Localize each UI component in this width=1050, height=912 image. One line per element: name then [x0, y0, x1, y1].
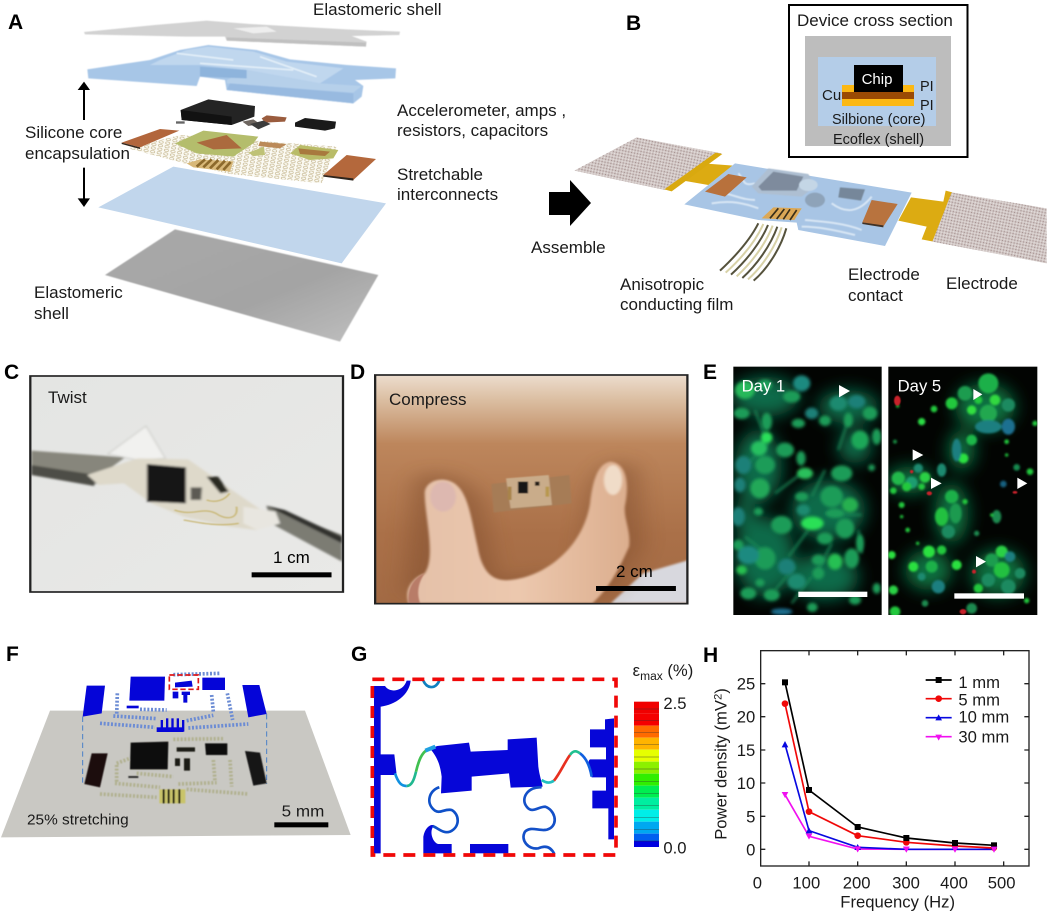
x axis title: Frequency (Hz)	[840, 893, 955, 912]
panel letter B: B	[626, 12, 641, 35]
arrowhead markers	[913, 389, 1027, 567]
y tick labels: 15	[737, 741, 755, 760]
icon: block arrow	[549, 180, 591, 226]
label: silicone core encapsulation: Silicone core	[25, 123, 122, 142]
inset title: Device cross section	[797, 11, 953, 30]
photo background	[31, 377, 343, 592]
x tick labels: 200	[843, 873, 871, 892]
scale bar	[954, 593, 1024, 599]
label: stretchable interconnects: Stretchable	[397, 165, 483, 184]
twisted device	[31, 426, 342, 562]
panel letter F: F	[6, 643, 19, 666]
series 30 mm	[782, 792, 997, 853]
y axis title: Power density (mV	[712, 700, 731, 840]
compress photo image	[375, 375, 689, 604]
left electrode mesh	[574, 137, 722, 190]
scale bar	[798, 592, 867, 597]
silbione core layer	[818, 57, 936, 126]
red dashed region box	[169, 675, 198, 689]
y tick labels: 25	[737, 675, 755, 694]
label: elastomeric shell bottom: Elastomeric	[34, 283, 123, 302]
arrow up	[78, 82, 90, 120]
panel letter A: A	[8, 11, 23, 34]
scale bar 5 mm	[274, 804, 328, 827]
label: day 5: Day 5	[898, 377, 941, 396]
label: anisotropic conducting film: conducting film	[620, 295, 733, 314]
chip block: Chip	[862, 71, 892, 88]
ecoflex shell layer	[805, 36, 951, 146]
y axis title: )	[712, 688, 731, 694]
y tick labels	[737, 675, 755, 859]
blue dashed guides	[83, 714, 267, 784]
right gold connector	[898, 191, 952, 242]
label: 25% stretching: 25% stretching	[27, 811, 129, 828]
y tick labels: 0	[746, 840, 755, 859]
label: 2 cm: 2 cm	[616, 562, 653, 581]
panel letter E: E	[703, 361, 717, 384]
y tick labels: 10	[737, 774, 755, 793]
legend 5 mm: 5 mm	[958, 691, 1000, 710]
anisotropic conducting film strands	[720, 223, 786, 281]
series 5 mm	[782, 700, 997, 851]
arrow down	[78, 168, 90, 207]
line chart	[712, 651, 1029, 912]
exploded layer stack	[78, 21, 400, 342]
label: electrode contact: contact	[848, 286, 903, 305]
colour bar max label: 2.5	[663, 694, 686, 713]
panel G: strain simulation	[351, 643, 693, 857]
red dashed frame	[372, 679, 616, 855]
panel F: stretching overlay	[1, 643, 351, 837]
axes and ticks	[761, 651, 1029, 866]
x tick labels: 500	[988, 873, 1016, 892]
panel E: fluorescence microscopy	[732, 367, 1038, 617]
solid blue layout regions	[374, 681, 614, 853]
colour bar title: (%)	[663, 661, 693, 680]
inset frame	[789, 5, 968, 157]
green cells day 5	[887, 373, 1038, 617]
right electrode mesh	[932, 192, 1047, 263]
legend 30 mm: 30 mm	[958, 727, 1009, 746]
panel letter C: C	[4, 361, 19, 384]
chip block	[854, 65, 903, 92]
day 1 image	[732, 367, 882, 615]
y axis title: 2	[712, 694, 724, 700]
x tick labels	[753, 873, 1016, 892]
simulated layout in blue	[83, 673, 267, 732]
label: accelerometer and passives: Accelerometer, amps ,	[397, 101, 566, 120]
photo of stretched device	[84, 739, 267, 803]
colour bar title: ε	[633, 661, 640, 680]
legend	[926, 673, 1009, 746]
label: silbione core: Silbione (core)	[832, 112, 926, 128]
photo frame	[30, 376, 343, 592]
strain map	[372, 661, 693, 857]
series 1 mm	[782, 679, 997, 848]
panel B: assembled device	[574, 5, 1047, 314]
colour bar title: max	[640, 669, 663, 683]
silicone core top layer	[87, 45, 396, 103]
left gold connector	[664, 153, 733, 191]
encapsulated circuit board	[684, 163, 912, 246]
label: stretchable interconnects: interconnects	[397, 185, 498, 204]
panel letter G: G	[351, 643, 367, 666]
series 10 mm	[782, 741, 994, 850]
panel C: twist photo	[30, 376, 343, 592]
label: day 1: Day 1	[742, 377, 785, 396]
copper layer	[842, 92, 914, 99]
label: electrode contact: Electrode	[848, 265, 920, 284]
top elastomeric shell layer	[84, 21, 400, 47]
polyimide layer	[842, 85, 914, 106]
bottom elastomeric sheet	[105, 229, 378, 342]
green cells day 1	[732, 375, 881, 615]
label: PI upper: PI	[920, 79, 934, 95]
label: electrode: Electrode	[946, 274, 1018, 293]
colour bar	[634, 702, 659, 847]
hand and device	[404, 461, 689, 603]
y tick labels: 20	[737, 708, 755, 727]
day 5 image	[887, 367, 1038, 617]
label: compress: Compress	[389, 390, 466, 409]
x tick labels: 400	[940, 873, 968, 892]
legend 1 mm: 1 mm	[958, 673, 1000, 692]
scale bar 5 mm: 5 mm	[282, 804, 324, 821]
label: elastomeric shell bottom: shell	[34, 304, 69, 323]
legend 10 mm: 10 mm	[958, 707, 1009, 726]
lower silicone core sheet	[98, 167, 386, 263]
label: ecoflex shell: Ecoflex (shell)	[833, 132, 924, 148]
label: Cu: Cu	[822, 87, 841, 104]
label: twist: Twist	[48, 388, 87, 407]
assembled device drawing	[574, 137, 1047, 281]
x tick labels: 0	[753, 873, 762, 892]
label: accelerometer and passives: resistors, capacitors	[397, 121, 548, 140]
scale bar 2 cm	[596, 586, 676, 591]
panel letter H: H	[703, 644, 718, 667]
photo frame	[375, 375, 687, 604]
assemble arrow with label	[531, 180, 606, 257]
chips and passive components	[176, 99, 336, 131]
stretchable interconnect layer	[122, 129, 376, 183]
scale bar 1 cm	[252, 572, 332, 577]
panel H: power density chart	[703, 644, 1029, 912]
x tick labels: 100	[792, 873, 820, 892]
grey substrate	[1, 711, 351, 837]
stretched device comparison	[1, 673, 351, 837]
panel letter D: D	[350, 361, 365, 384]
panel D: compress photo	[375, 375, 689, 604]
redraw of magenta markers on top	[854, 846, 997, 853]
colour bar min label: 0.0	[663, 838, 686, 857]
twist photo image	[30, 376, 343, 592]
x tick labels: 300	[892, 873, 920, 892]
label: assemble: Assemble	[531, 238, 606, 257]
arrowhead marker	[839, 385, 850, 397]
label: elastomeric shell top: Elastomeric shell	[313, 0, 442, 19]
y tick labels: 5	[746, 807, 755, 826]
inset: device cross section	[789, 5, 968, 157]
strained meander traces	[395, 681, 592, 854]
label: PI lower: PI	[920, 98, 934, 114]
label: silicone core encapsulation: encapsulation	[25, 144, 130, 163]
panel A: exploded device layers	[8, 0, 566, 342]
skin background	[376, 376, 687, 603]
label: 1 cm: 1 cm	[273, 548, 310, 567]
label: anisotropic conducting film: Anisotropic	[620, 275, 704, 294]
